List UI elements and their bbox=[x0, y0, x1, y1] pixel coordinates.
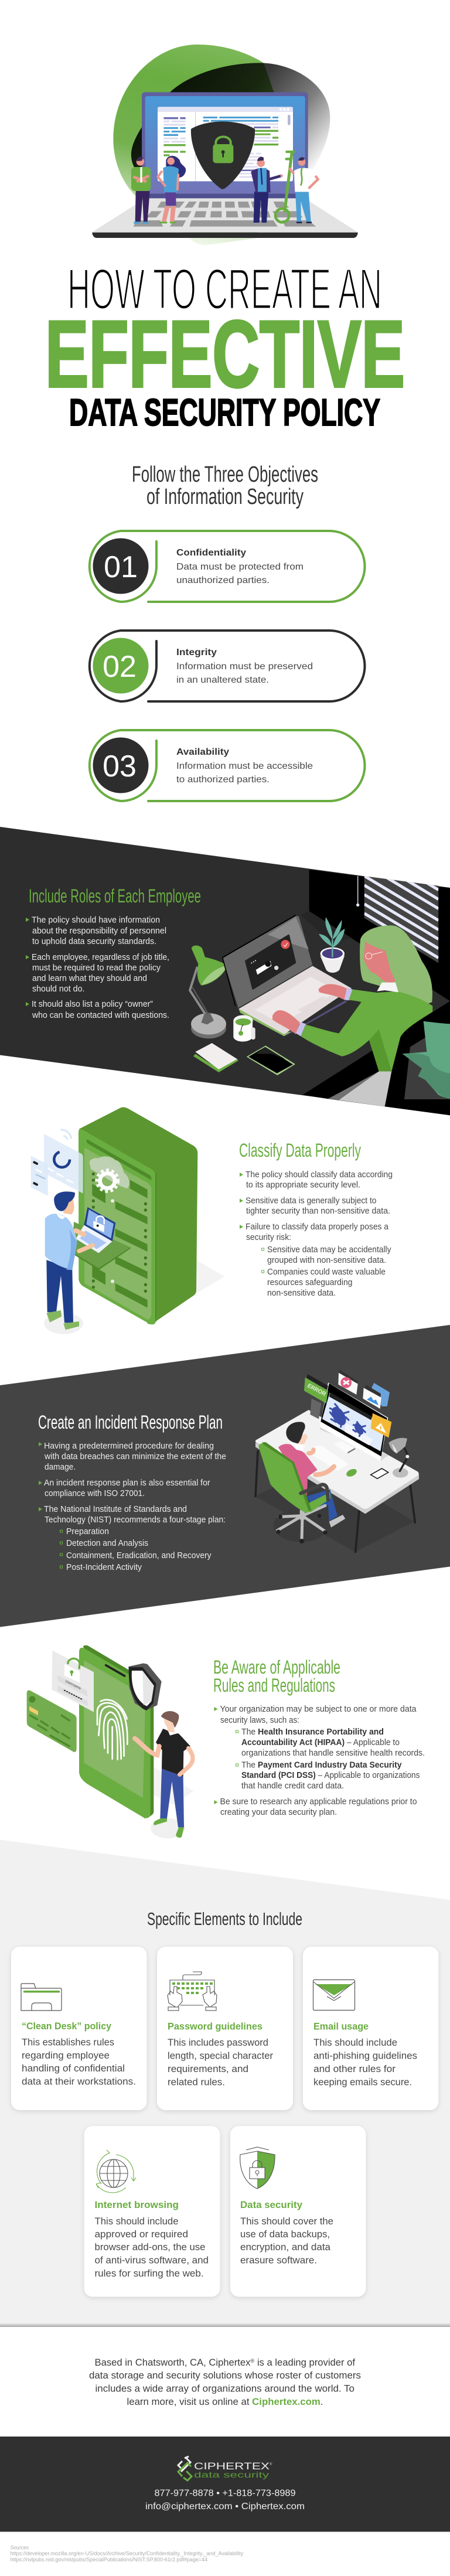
bullet list bbox=[39, 1442, 226, 1572]
contact details: info@ciphertex.com • Ciphertex.com bbox=[145, 2502, 305, 2512]
mug bbox=[233, 1015, 255, 1041]
objective 03: to authorized parties. bbox=[176, 775, 270, 785]
card: password guidelines bbox=[157, 1947, 293, 2110]
card: data security: use of data backups, bbox=[240, 2229, 330, 2240]
card: clean desk policy: data at their workstations. bbox=[22, 2077, 136, 2087]
bullet list: The National Institute of Standards and bbox=[44, 1505, 187, 1514]
bullet list: that handle credit card data. bbox=[241, 1781, 344, 1791]
laptop bbox=[222, 915, 352, 1036]
bullet list: and learn what they should and bbox=[32, 974, 147, 983]
hero illustration: laptop with security shield bbox=[92, 45, 358, 246]
credit card bbox=[27, 1690, 77, 1752]
card: email usage: anti-phishing guidelines bbox=[313, 2051, 417, 2062]
monitor bbox=[320, 1382, 388, 1461]
card: data security bbox=[230, 2126, 366, 2297]
illustration: desk with malware on monitor bbox=[255, 1369, 419, 1552]
heading: three objectives: of Information Security bbox=[146, 485, 304, 509]
bullet list: It should also list a policy “owner” bbox=[32, 1000, 153, 1009]
objective 01: unauthorized parties. bbox=[176, 575, 270, 585]
card: internet browsing: browser add-ons, the use bbox=[95, 2242, 205, 2253]
heading: Rules and Regulations bbox=[213, 1675, 335, 1696]
card: internet browsing: This should include bbox=[95, 2216, 178, 2227]
objective 02: Integrity bbox=[176, 648, 217, 657]
office chair bbox=[259, 1442, 330, 1543]
card: internet browsing: approved or required bbox=[95, 2229, 188, 2240]
card: clean desk policy: regarding employee bbox=[22, 2050, 110, 2061]
person in chair bbox=[278, 1422, 345, 1528]
desk lamp bbox=[190, 945, 227, 1038]
floating panels bbox=[31, 1130, 83, 1196]
card: email usage: keeping emails secure. bbox=[313, 2077, 412, 2087]
bullet list: Post-Incident Activity bbox=[66, 1563, 142, 1572]
objective 02: Information must be preserved bbox=[176, 662, 313, 672]
window blinds bbox=[356, 876, 438, 963]
bullet list: creating your data security plan. bbox=[220, 1808, 337, 1817]
bullet list: security risk: bbox=[246, 1233, 291, 1242]
heading: three objectives: Follow the Three Objectives bbox=[132, 462, 318, 487]
logo: Ciphertex data security bbox=[178, 2456, 272, 2480]
card: internet browsing: Internet browsing bbox=[95, 2200, 179, 2210]
objective 03: Information must be accessible bbox=[176, 761, 313, 771]
bullet list bbox=[240, 1170, 393, 1298]
bullet list: organizations that handle sensitive health records. bbox=[241, 1749, 425, 1758]
laptop lid bbox=[142, 92, 308, 199]
bullet list: Preparation bbox=[66, 1527, 109, 1536]
fingerprint bbox=[97, 1700, 127, 1760]
heading: Be Aware of Applicable bbox=[213, 1657, 340, 1678]
bullet list: Having a predetermined procedure for dealing bbox=[44, 1442, 214, 1451]
bullet list: Companies could waste valuable bbox=[267, 1267, 386, 1277]
logo: Ciphertex data security: CIPHERTEX bbox=[194, 2461, 270, 2472]
objective 01: Data must be protected from bbox=[176, 562, 304, 572]
desk top bbox=[255, 1410, 419, 1514]
card: internet browsing bbox=[84, 2126, 220, 2297]
card: data security: Data security bbox=[240, 2200, 303, 2210]
objective 03 bbox=[90, 730, 364, 801]
panel: classify data properly bbox=[31, 1107, 393, 1334]
logo: Ciphertex data security: ® bbox=[270, 2462, 272, 2466]
bullet list: Containment, Eradication, and Recovery bbox=[66, 1551, 212, 1560]
dark blob bbox=[131, 63, 330, 178]
bullet list: Each employee, regardless of job title, bbox=[32, 953, 169, 962]
bullet list: to its appropriate security level. bbox=[246, 1180, 360, 1190]
bullet list: who can be contacted with questions. bbox=[32, 1011, 169, 1020]
browser popups bbox=[338, 1369, 390, 1409]
notebook bbox=[193, 1043, 238, 1072]
panel: specific elements to include bbox=[0, 1840, 450, 2327]
about text: ® bbox=[250, 2358, 255, 2364]
card: password guidelines: requirements, and bbox=[168, 2064, 248, 2074]
title bbox=[45, 257, 405, 434]
bullet list: Technology (NIST) recommends a four-stage plan: bbox=[45, 1515, 226, 1525]
bullet list: The Health Insurance Portability and bbox=[241, 1727, 384, 1737]
bullet list: The policy should have information bbox=[32, 915, 160, 925]
card: data security: This should cover the bbox=[240, 2216, 333, 2227]
panel: create an incident response plan bbox=[0, 1325, 450, 1627]
about text: Based in Chatsworth, CA, Ciphertex bbox=[95, 2357, 247, 2368]
about text: is a leading provider of bbox=[254, 2357, 355, 2368]
warning panel bbox=[371, 1413, 391, 1437]
bullet list: non-sensitive data. bbox=[267, 1289, 336, 1298]
objective 02 bbox=[90, 631, 364, 701]
login panel: •••••••• bbox=[62, 1688, 84, 1702]
icon: envelope bbox=[313, 1979, 355, 2010]
bullet list: damage. bbox=[45, 1463, 76, 1472]
bullet list: Standard (PCI DSS) – Applicable to organizations bbox=[241, 1771, 420, 1780]
phone bbox=[247, 1045, 295, 1075]
laptop keyboard deck bbox=[92, 198, 358, 238]
bullet list: grouped with non-sensitive data. bbox=[267, 1256, 386, 1265]
bullet list: The policy should classify data according bbox=[246, 1170, 393, 1180]
card: password guidelines: length, special character bbox=[168, 2051, 274, 2062]
card: clean desk policy: handling of confidential bbox=[22, 2063, 125, 2074]
bullet list: Sensitive data is generally subject to bbox=[246, 1197, 376, 1206]
bullet list: Detection and Analysis bbox=[66, 1539, 148, 1548]
bullet list bbox=[26, 915, 169, 1020]
cloud and gear bbox=[90, 1156, 129, 1191]
man in suit bbox=[251, 157, 283, 223]
card: data security: encryption, and data bbox=[240, 2242, 331, 2253]
shelf and laptop bbox=[72, 1207, 131, 1270]
card: email usage bbox=[303, 1947, 438, 2110]
heading: Include Roles of Each Employee bbox=[29, 885, 201, 907]
shield with padlock bbox=[191, 121, 255, 189]
bullet list: about the responsibility of personnel bbox=[32, 926, 166, 936]
bullet list: An incident response plan is also essential for bbox=[44, 1478, 210, 1488]
logo: Ciphertex data security: data security bbox=[194, 2470, 269, 2479]
icon: globe with arrows bbox=[96, 2150, 136, 2193]
person in green shirt bbox=[131, 157, 151, 224]
card: clean desk policy bbox=[11, 1947, 146, 2110]
woman bbox=[272, 925, 432, 1106]
man bbox=[135, 1711, 193, 1838]
person bbox=[45, 1191, 93, 1330]
login panel bbox=[52, 1651, 94, 1712]
objective 02: in an unaltered state. bbox=[176, 675, 269, 685]
sources: https://developer.mozilla.org/en-US/docs/Archive/Security/Confidentiality,_Integrity,_and_Availability bbox=[11, 2551, 243, 2557]
sources bbox=[11, 2544, 243, 2563]
desk lamp bbox=[388, 1438, 409, 1478]
card: email usage: Email usage bbox=[313, 2022, 369, 2032]
panel: be aware of applicable rules and regulations bbox=[27, 1645, 425, 1838]
phone body bbox=[79, 1645, 154, 1818]
error panel: ERROR bbox=[306, 1383, 327, 1398]
bullet list: The Payment Card Industry Data Security bbox=[241, 1760, 402, 1770]
heading: Specific Elements to Include bbox=[147, 1909, 302, 1929]
card: data security: erasure software. bbox=[240, 2255, 317, 2266]
bullet list: Accountability Act (HIPAA) – Applicable to bbox=[241, 1738, 400, 1747]
bullet list: Failure to classify data properly poses a bbox=[246, 1222, 389, 1232]
card: password guidelines: Password guidelines bbox=[168, 2022, 262, 2032]
card: email usage: and other rules for bbox=[313, 2064, 396, 2074]
card: clean desk policy: This establishes rules bbox=[22, 2037, 114, 2047]
illustration: phone with fingerprint bbox=[27, 1645, 193, 1838]
heading: Classify Data Properly bbox=[239, 1140, 361, 1161]
about text bbox=[89, 2357, 361, 2407]
shield bbox=[128, 1663, 162, 1710]
objective 01: 01 bbox=[104, 550, 138, 584]
woman in blue top bbox=[158, 156, 186, 223]
sources: Sources bbox=[11, 2544, 29, 2551]
contact details: 877-977-8878 • +1-818-773-8989 bbox=[155, 2489, 296, 2499]
bullet list: security laws, such as: bbox=[220, 1716, 299, 1725]
bullet list: Sensitive data may be accidentally bbox=[267, 1245, 391, 1255]
about text: data storage and security solutions whose roster of customers bbox=[89, 2370, 361, 2381]
contact details bbox=[145, 2489, 305, 2512]
heading: three objectives bbox=[132, 462, 318, 509]
panel: include roles of each employee bbox=[0, 827, 450, 1115]
icon: shield with lock bbox=[240, 2147, 275, 2189]
bullet list: should not do. bbox=[32, 984, 84, 994]
bullet list: resources safeguarding bbox=[267, 1278, 353, 1287]
about text: includes a wide array of organizations around the world. To bbox=[95, 2384, 354, 2394]
heading bbox=[213, 1657, 340, 1696]
objective 01 bbox=[90, 531, 365, 602]
about text: learn more, visit us online at Ciphertex.com. bbox=[127, 2397, 323, 2407]
objective 03: Availability bbox=[176, 747, 229, 757]
heading: Create an Incident Response Plan bbox=[38, 1412, 223, 1433]
error panel bbox=[304, 1374, 328, 1419]
green blob bbox=[113, 45, 283, 246]
man in white shirt bbox=[289, 157, 318, 223]
card: password guidelines: This includes password bbox=[168, 2037, 268, 2048]
icon: keyboard with hands bbox=[168, 1972, 217, 2011]
objective 02: 02 bbox=[103, 650, 137, 684]
card: password guidelines: related rules. bbox=[168, 2077, 225, 2087]
card: internet browsing: of anti-virus software, and bbox=[95, 2255, 209, 2266]
bullet list bbox=[214, 1705, 425, 1817]
bullet list: Be sure to research any applicable regulations prior to bbox=[220, 1797, 417, 1807]
objective 01: Confidentiality bbox=[176, 548, 246, 558]
objective 03: 03 bbox=[103, 749, 137, 783]
bullet list: Your organization may be subject to one or more data bbox=[220, 1705, 417, 1714]
bullet list: must be required to read the policy bbox=[32, 963, 161, 973]
bullet list: tighter security than non-sensitive data. bbox=[246, 1207, 390, 1216]
icon: folder bbox=[21, 1984, 62, 2011]
illustration: server rack with person bbox=[31, 1107, 224, 1334]
plant in pot bbox=[319, 917, 345, 973]
plant leaves bbox=[403, 1021, 450, 1099]
card: clean desk policy: “Clean Desk” policy bbox=[22, 2021, 112, 2032]
card: internet browsing: rules for surfing the web. bbox=[95, 2268, 204, 2279]
footer bbox=[0, 2437, 450, 2531]
keyboard, mouse, tablet bbox=[312, 1446, 388, 1478]
icon: green key bbox=[275, 152, 294, 222]
bullet list: to uphold data security standards. bbox=[32, 937, 156, 946]
sources: https://nvlpubs.nist.gov/nistpubs/SpecialPublications/NIST.SP.800-61r2.pdf#page=44 bbox=[11, 2557, 207, 2563]
login panel: Username bbox=[64, 1679, 82, 1691]
bullet list: compliance with ISO 27001. bbox=[45, 1489, 145, 1498]
bullet list: with data breaches can minimize the extent of the bbox=[44, 1452, 226, 1461]
card: email usage: This should include bbox=[313, 2037, 397, 2048]
illustration: woman at laptop bbox=[189, 870, 450, 1116]
